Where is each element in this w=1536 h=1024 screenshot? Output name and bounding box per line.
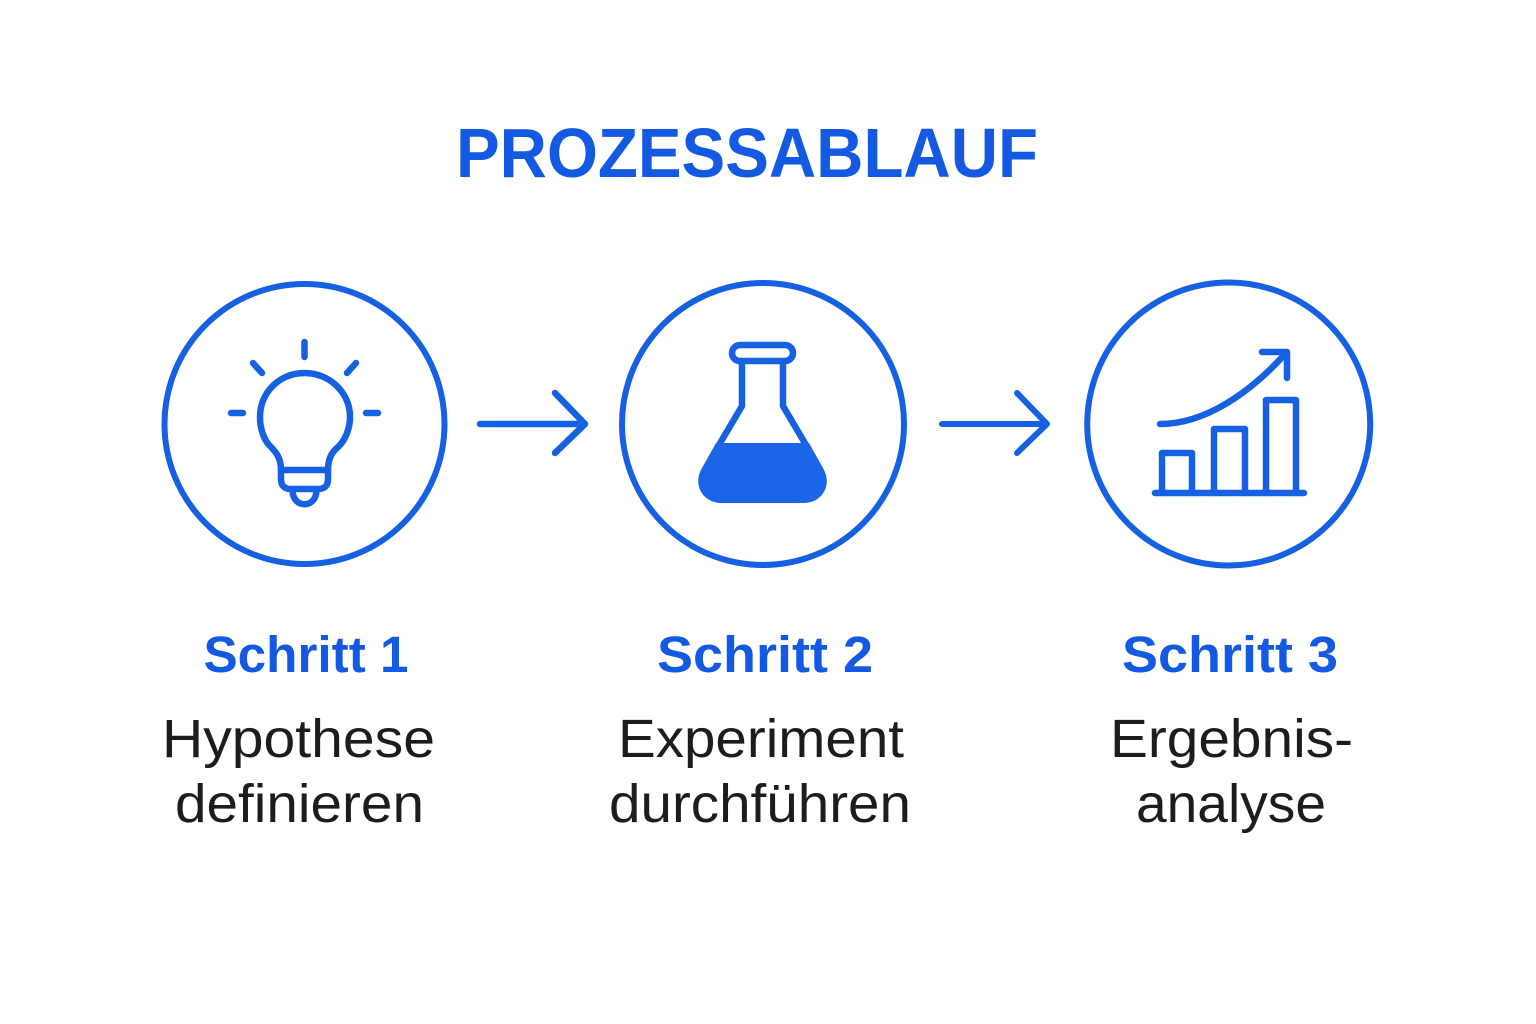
step 3 label: Schritt 3: [1122, 626, 1338, 683]
arrow 2: [942, 393, 1047, 453]
step 3 description: Ergebnis-: [1110, 709, 1353, 769]
arrow 1: [480, 393, 585, 453]
step 1 label: Schritt 1: [204, 626, 408, 683]
step 2: circle with flask icon: [622, 283, 904, 565]
icon: flask: [698, 345, 827, 503]
step 1 description: Hypothese: [162, 709, 435, 769]
step 3: circle with chart icon: [1087, 282, 1370, 566]
step 2 description: Experiment: [618, 709, 904, 769]
step 3 description: analyse: [1136, 774, 1326, 834]
title: PROZESSABLAUF: [456, 114, 1038, 192]
step 1: circle with lightbulb icon: [164, 284, 444, 564]
step 2 description: durchführen: [609, 774, 911, 834]
step 2 label: Schritt 2: [657, 626, 873, 683]
icon: growth chart: [1155, 352, 1304, 493]
step 1 description: definieren: [175, 774, 424, 834]
icon: lightbulb: [231, 342, 378, 504]
